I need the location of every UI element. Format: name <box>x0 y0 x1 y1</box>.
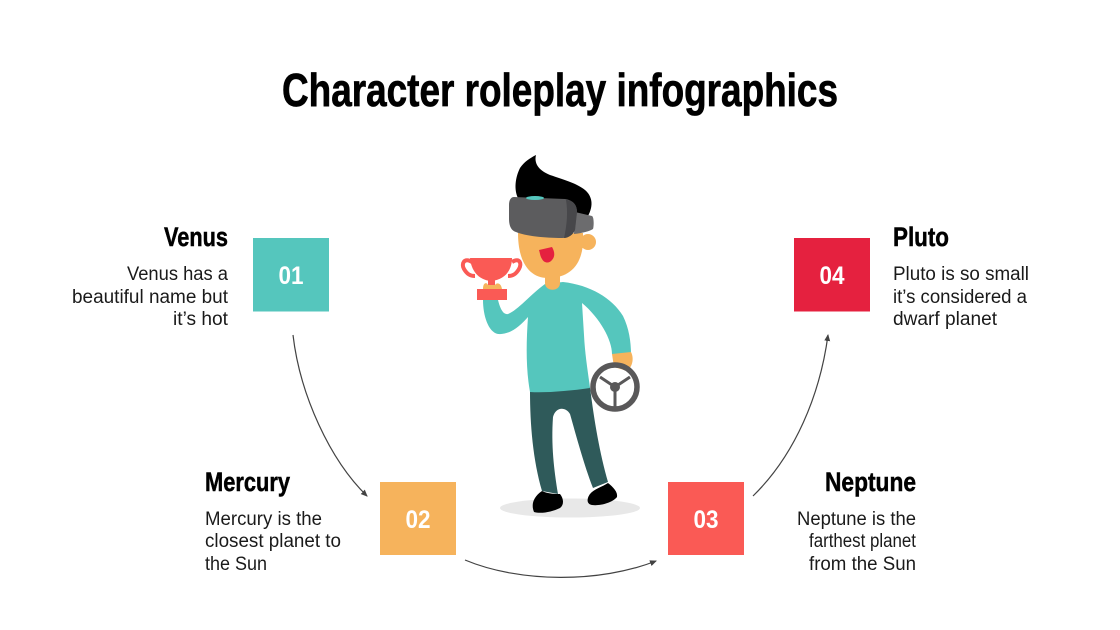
heading: Venus: Venus <box>164 222 228 252</box>
hair <box>516 155 592 216</box>
trophy <box>463 258 520 300</box>
number box 01 <box>253 238 329 312</box>
text: Venus description: beautiful name but <box>72 287 229 308</box>
number box 02: 02 <box>406 506 430 534</box>
panel: Pluto <box>794 222 1029 330</box>
arrow: 02 to 03 <box>465 560 656 577</box>
number box 04 <box>794 238 870 312</box>
steering wheel <box>593 365 637 409</box>
character illustration <box>463 155 640 518</box>
number box 02 <box>380 482 456 555</box>
neck <box>545 274 560 290</box>
title: Character roleplay infographics <box>282 64 838 116</box>
heading: Neptune: Neptune <box>825 467 916 497</box>
text: Mercury description: Mercury is the <box>205 509 322 530</box>
panel: Venus <box>72 222 329 330</box>
text: Pluto description: Pluto is so small <box>893 264 1029 285</box>
panel: Mercury <box>205 467 456 575</box>
text: Pluto description: dwarf planet <box>893 309 998 330</box>
ground shadow <box>500 498 640 518</box>
text: Mercury description: the Sun <box>205 554 267 575</box>
text: Neptune description: Neptune is the <box>797 509 916 530</box>
text: Neptune description: farthest planet <box>809 531 917 552</box>
number box 03: 03 <box>694 506 718 534</box>
arrow: 03 to 04 <box>753 335 828 496</box>
number box 03 <box>668 482 744 555</box>
shoes <box>533 483 617 513</box>
text: Venus description: Venus has a <box>127 264 228 285</box>
arrow: 01 to 02 <box>293 335 367 496</box>
number box 01: 01 <box>278 262 304 290</box>
text: Mercury description: closest planet to <box>205 531 341 552</box>
legs <box>530 387 608 494</box>
number box 04: 04 <box>820 262 845 290</box>
panel: Neptune <box>668 467 917 575</box>
text: Pluto description: it’s considered a <box>893 287 1027 308</box>
text: Venus description: it’s hot <box>173 309 229 330</box>
head and ear <box>518 233 583 278</box>
text: Neptune description: from the Sun <box>809 554 916 575</box>
VR headset <box>574 212 594 234</box>
heading: Pluto: Pluto <box>893 222 949 252</box>
heading: Mercury: Mercury <box>205 467 290 497</box>
right hand <box>612 352 633 371</box>
mouth <box>539 247 554 263</box>
shirt and arms <box>483 282 631 392</box>
